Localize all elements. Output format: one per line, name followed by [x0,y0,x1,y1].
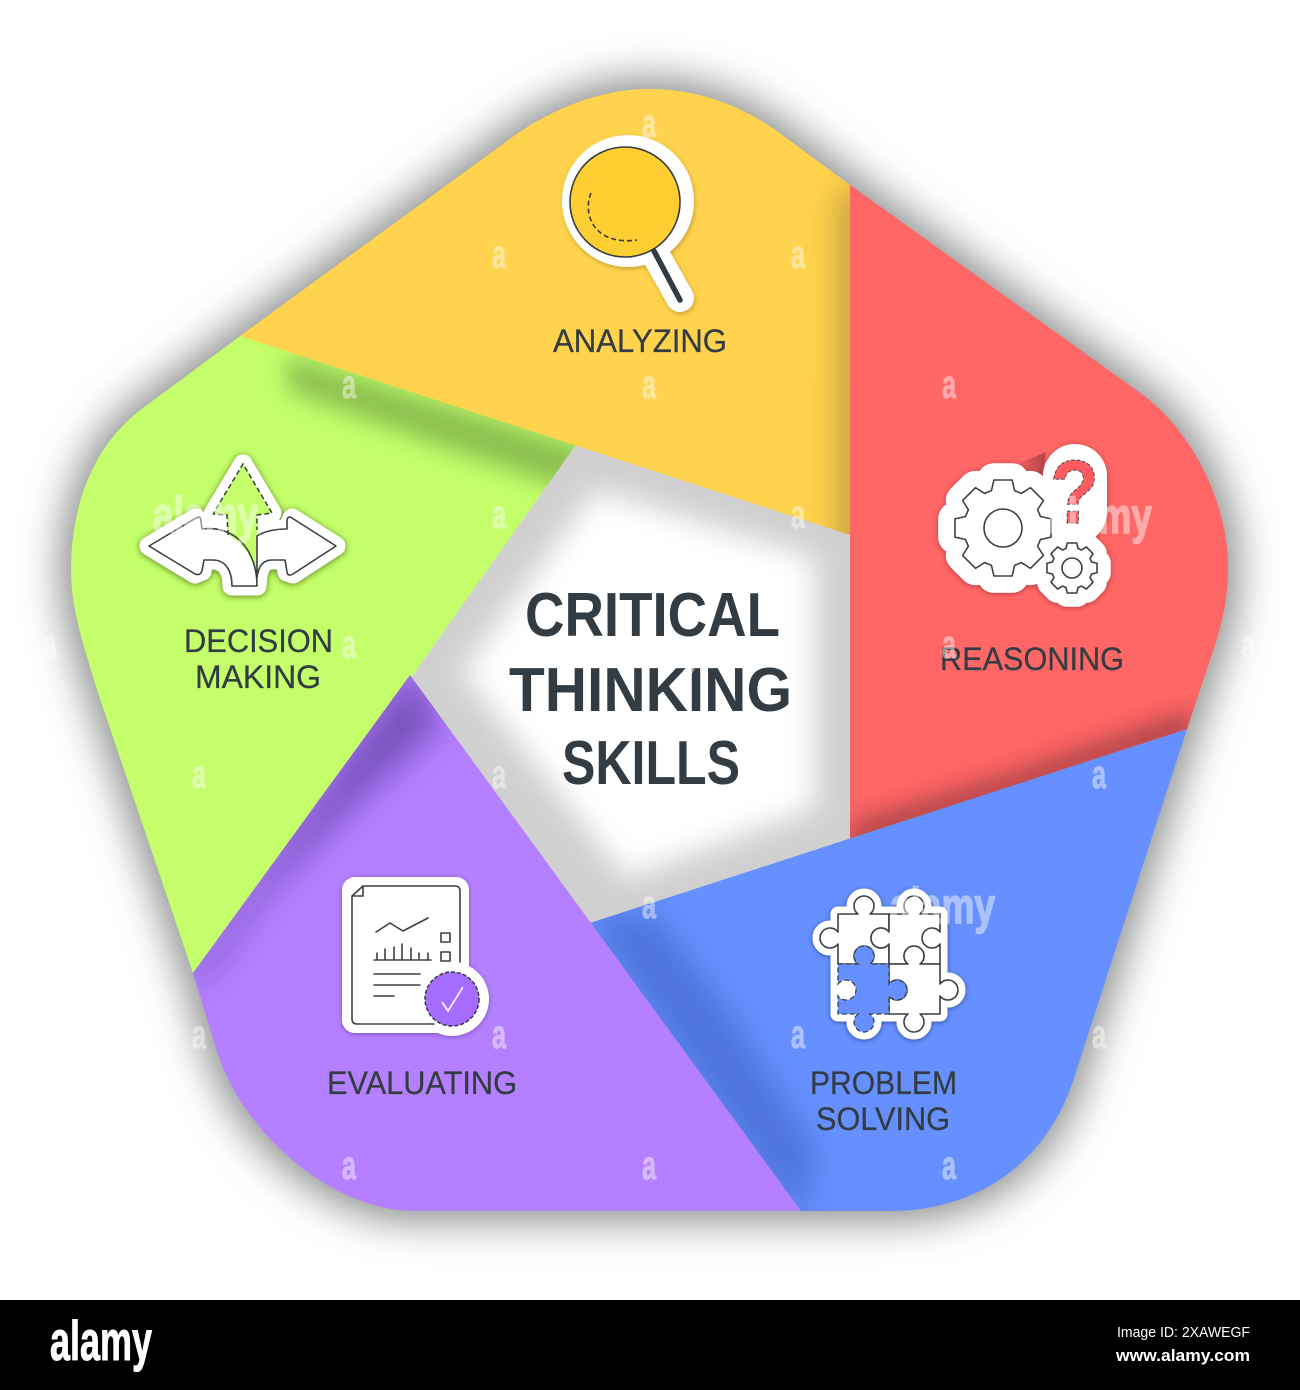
label: evaluating: EVALUATING [327,1065,517,1101]
watermark logos: alamy [1047,488,1152,544]
watermark grid: a [642,102,656,146]
icon: gears with question mark: ? [1050,443,1099,543]
label: problem solving: SOLVING [816,1101,950,1137]
watermark grid: a [492,753,506,797]
icon: puzzle pieces [820,896,958,1032]
outer drop shadow [71,89,1228,1211]
label: decision making [184,623,333,695]
icon: three-way decision arrows [149,464,336,586]
title [509,581,792,798]
watermark grid: a [1092,1013,1106,1057]
watermark grid: a [342,623,356,667]
panel: reasoning [845,180,1235,850]
label: decision making: MAKING [195,659,321,695]
title: CRITICAL [525,581,780,650]
label: problem solving: PROBLEM [810,1065,957,1101]
panel: analyzing [240,89,853,535]
footer image id: Image ID: 2XAWEGF [1117,1324,1250,1341]
watermark grid: a [492,493,506,537]
title: SKILLS [562,729,740,798]
watermark grid: a [192,1013,206,1057]
panel: decision making [65,330,590,985]
watermark logos: alamy [153,487,258,543]
watermark grid: a [642,883,656,927]
watermark grid: a [942,363,956,407]
watermark logos [153,487,1152,934]
watermark grid: a [642,363,656,407]
watermark grid: a [192,753,206,797]
watermark grid: a [43,623,57,667]
icon: report document with check [342,877,489,1036]
watermark grid: a [492,1013,506,1057]
panel: center [412,446,850,923]
watermark grid: a [1241,623,1255,667]
watermark logos: alamy [890,878,995,934]
watermark grid [43,102,1255,1188]
watermark grid: a [342,363,356,407]
watermark grid: a [342,1144,356,1188]
watermark grid: a [791,233,805,277]
label: problem solving [810,1065,957,1137]
icon: magnifying glass [562,135,694,300]
watermark grid: a [942,1144,956,1188]
title: THINKING [509,656,792,725]
watermark grid: a [1092,753,1106,797]
footer logo: alamy [50,1309,152,1372]
footer bar [0,1300,1300,1390]
footer url: www.alamy.com [1115,1346,1250,1365]
watermark grid: a [791,493,805,537]
panel: problem solving [585,720,1195,1225]
label: analyzing: ANALYZING [553,323,727,359]
label: reasoning: REASONING [940,641,1124,677]
watermark grid: a [791,1013,805,1057]
watermark logos: alamy [595,620,703,676]
watermark grid: a [492,233,506,277]
watermark grid: a [942,623,956,667]
watermark grid: a [642,1144,656,1188]
label: decision making: DECISION [184,623,333,659]
panel: evaluating [185,665,810,1220]
icon: gears with question mark [955,443,1099,593]
